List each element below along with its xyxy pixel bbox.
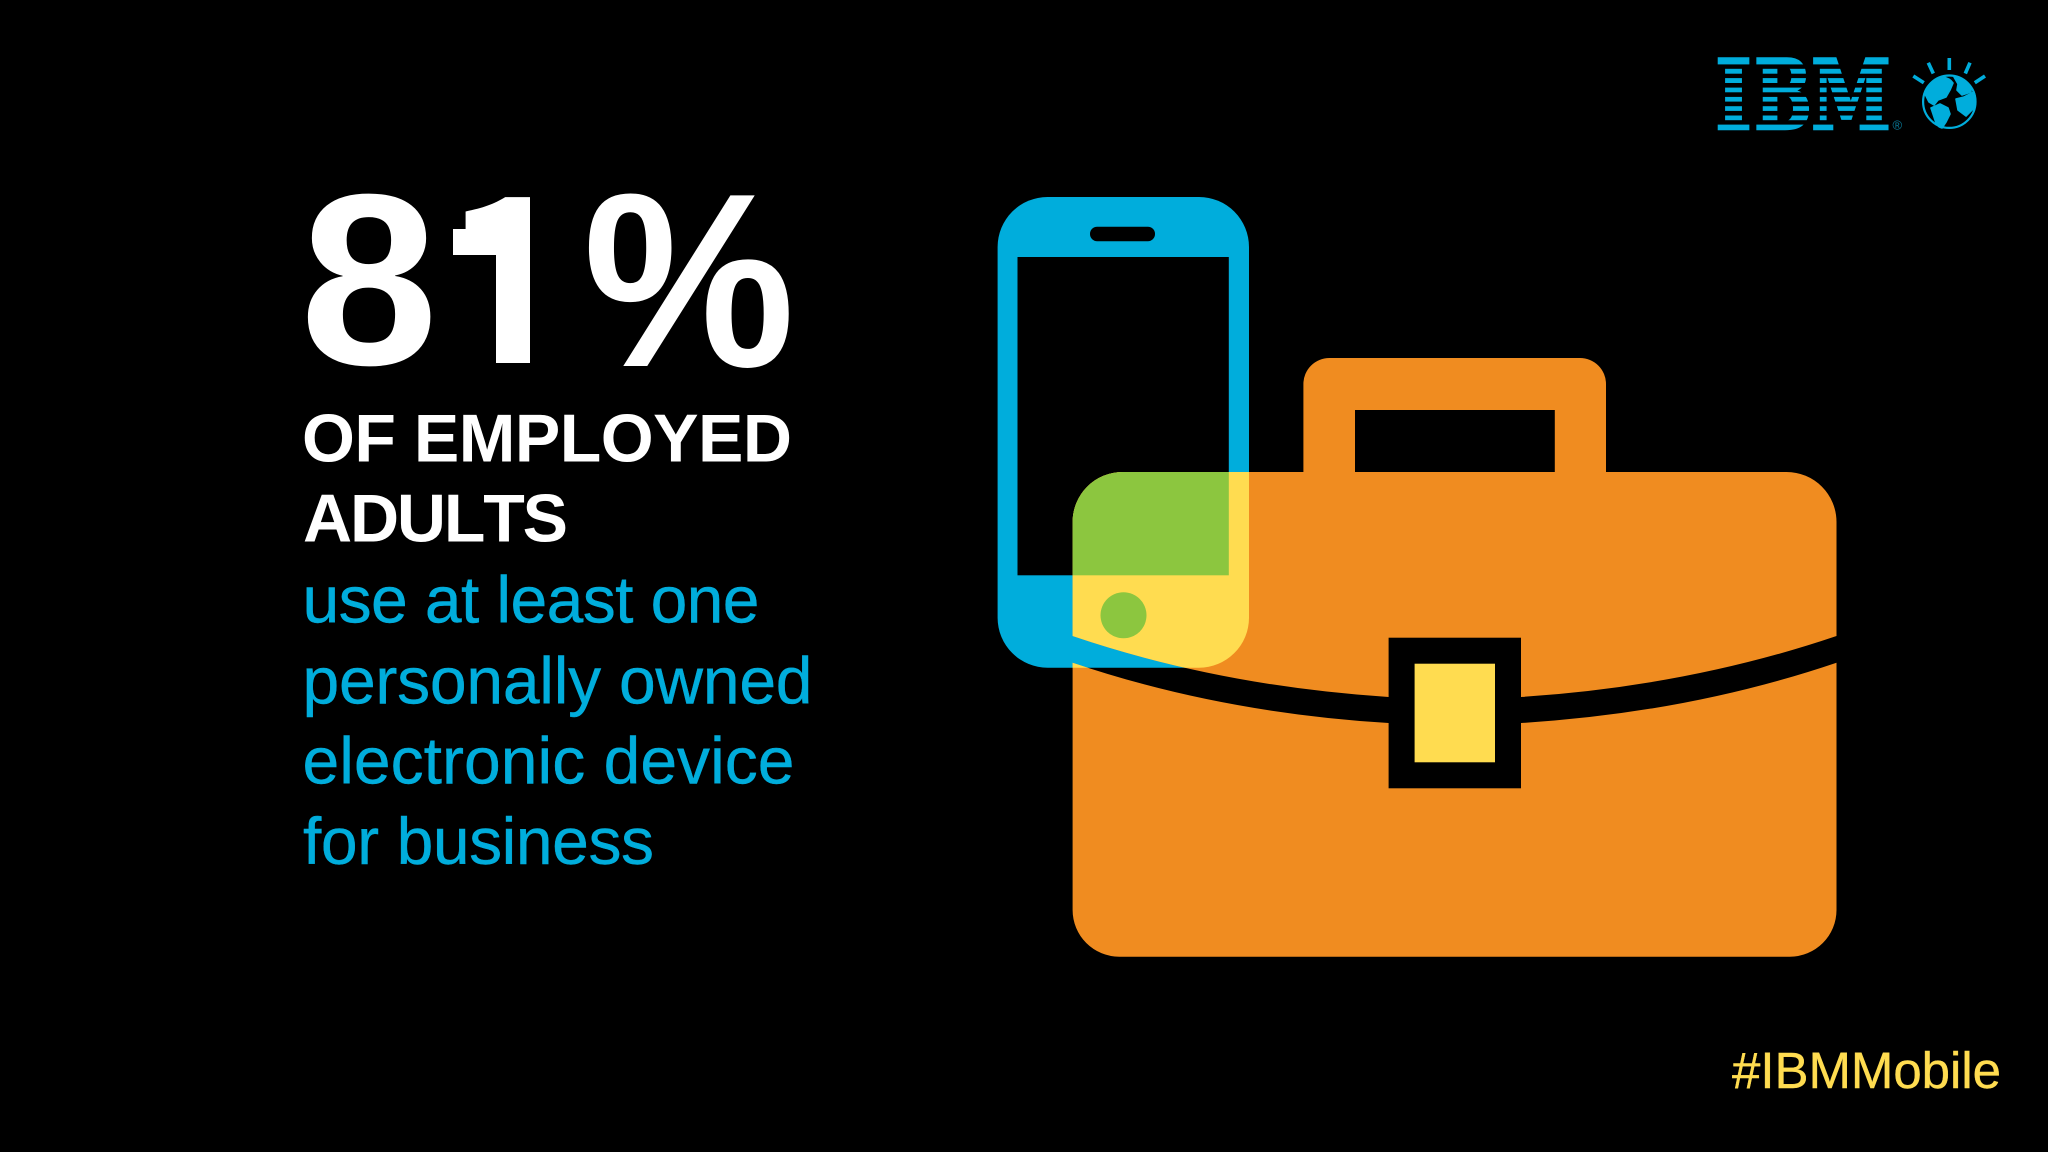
icon: smartphone xyxy=(998,197,1249,668)
infographic canvas xyxy=(304,57,1999,1089)
headline statistic: 81%: % xyxy=(583,141,795,419)
icon: smartphone and briefcase xyxy=(998,197,1837,957)
logo wordmark: M xyxy=(1811,39,1891,152)
logo: smarter planet globe xyxy=(1913,58,1985,128)
icon: briefcase clasp xyxy=(1389,638,1521,788)
headline statistic: 81%: 1 xyxy=(441,97,577,430)
globe outline xyxy=(1923,76,1976,128)
icon: briefcase body xyxy=(1072,472,1836,957)
headline statistic: 81%: 8 xyxy=(300,143,438,416)
registered mark: ® xyxy=(1892,118,1902,132)
globe rays xyxy=(1913,58,1985,83)
heading: of employed adults: ADULTS xyxy=(303,480,568,556)
description text xyxy=(302,562,812,878)
heading: of employed adults xyxy=(302,400,792,556)
logo: IBM xyxy=(1712,39,1902,152)
description text: electronic device xyxy=(302,724,794,798)
heading: of employed adults: OF EMPLOYED xyxy=(302,400,792,476)
logo wordmark: I xyxy=(1715,39,1752,152)
hashtag: #IBMMobile xyxy=(1732,1042,2001,1099)
globe continents xyxy=(1926,77,1976,128)
icon: briefcase handle xyxy=(1303,358,1606,473)
logo wordmark: B xyxy=(1754,39,1812,152)
logo wordmark xyxy=(1715,39,1891,152)
description text: personally owned xyxy=(302,644,812,718)
description text: use at least one xyxy=(302,562,760,636)
description text: for business xyxy=(303,804,654,878)
headline statistic: 81% xyxy=(300,97,795,430)
overlap of phone and briefcase xyxy=(1072,472,1249,668)
